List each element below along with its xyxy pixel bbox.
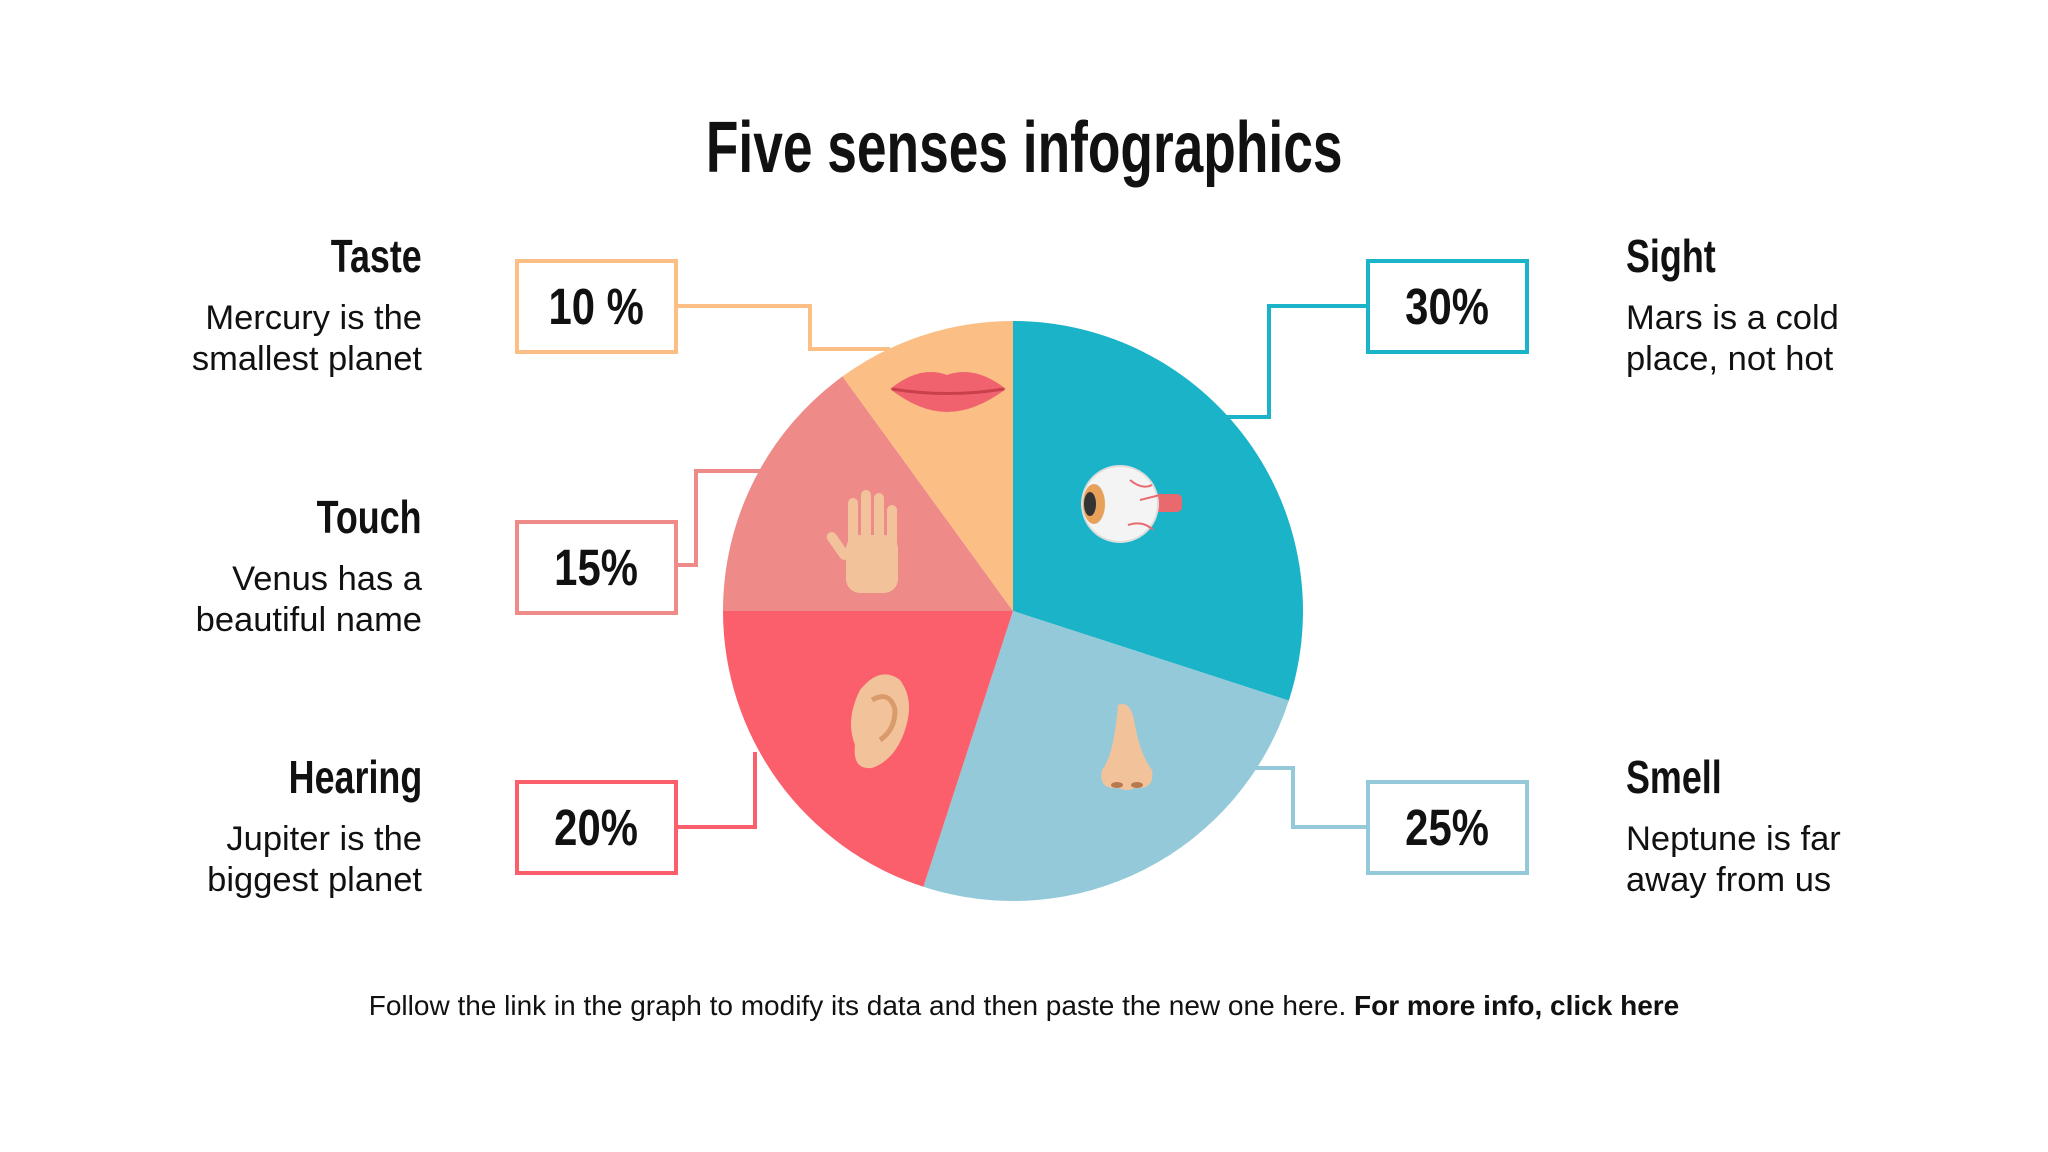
- text: taste: smallest planet: [192, 340, 422, 378]
- text: smell: away from us: [1626, 861, 1831, 899]
- text: taste: Mercury is the: [205, 299, 422, 337]
- text: touch: Touch: [317, 491, 422, 543]
- text: taste: Taste: [331, 230, 422, 282]
- connector: sight: [1226, 306, 1366, 417]
- footer note: Follow the link in the graph to modify its data and then paste the new one here. For more info, click here: [369, 990, 1679, 1021]
- box: taste 10%: [515, 259, 678, 354]
- text: taste: [192, 230, 422, 378]
- title: Five senses infographics: [706, 108, 1342, 188]
- box: hearing 20%: 20%: [555, 799, 638, 856]
- connector: touch: [677, 471, 763, 565]
- text: hearing: Hearing: [288, 751, 422, 803]
- text: hearing: [207, 751, 422, 899]
- box: hearing 20%: [515, 780, 678, 875]
- text: touch: beautiful name: [196, 601, 422, 639]
- icon: nose: [1101, 704, 1152, 790]
- text: touch: Venus has a: [232, 560, 422, 598]
- text: sight: Mars is a cold: [1626, 299, 1839, 337]
- text: smell: Neptune is far: [1626, 820, 1841, 858]
- box: taste 10%: 10 %: [549, 278, 644, 335]
- box: touch 15%: 15%: [555, 539, 638, 596]
- box: touch 15%: [515, 520, 678, 615]
- text: sight: place, not hot: [1626, 340, 1833, 378]
- box: smell 25%: 25%: [1406, 799, 1489, 856]
- box: smell 25%: [1366, 780, 1529, 875]
- connector: hearing: [677, 752, 755, 827]
- connector: taste: [677, 306, 890, 349]
- text: hearing: biggest planet: [207, 861, 422, 899]
- connector: smell: [1254, 768, 1366, 827]
- icon: eye: [1082, 466, 1182, 542]
- text: touch: [196, 491, 422, 639]
- text: hearing: Jupiter is the: [226, 820, 422, 858]
- text: smell: [1626, 751, 1841, 899]
- text: smell: Smell: [1626, 751, 1722, 803]
- icon: hand: [825, 490, 898, 593]
- text: sight: [1626, 230, 1839, 378]
- box: sight 30%: 30%: [1406, 278, 1489, 335]
- text: sight: Sight: [1626, 230, 1716, 282]
- icon: lips: [890, 372, 1006, 412]
- pie: [723, 321, 1303, 901]
- icon: ear: [851, 674, 909, 768]
- box: sight 30%: [1366, 259, 1529, 354]
